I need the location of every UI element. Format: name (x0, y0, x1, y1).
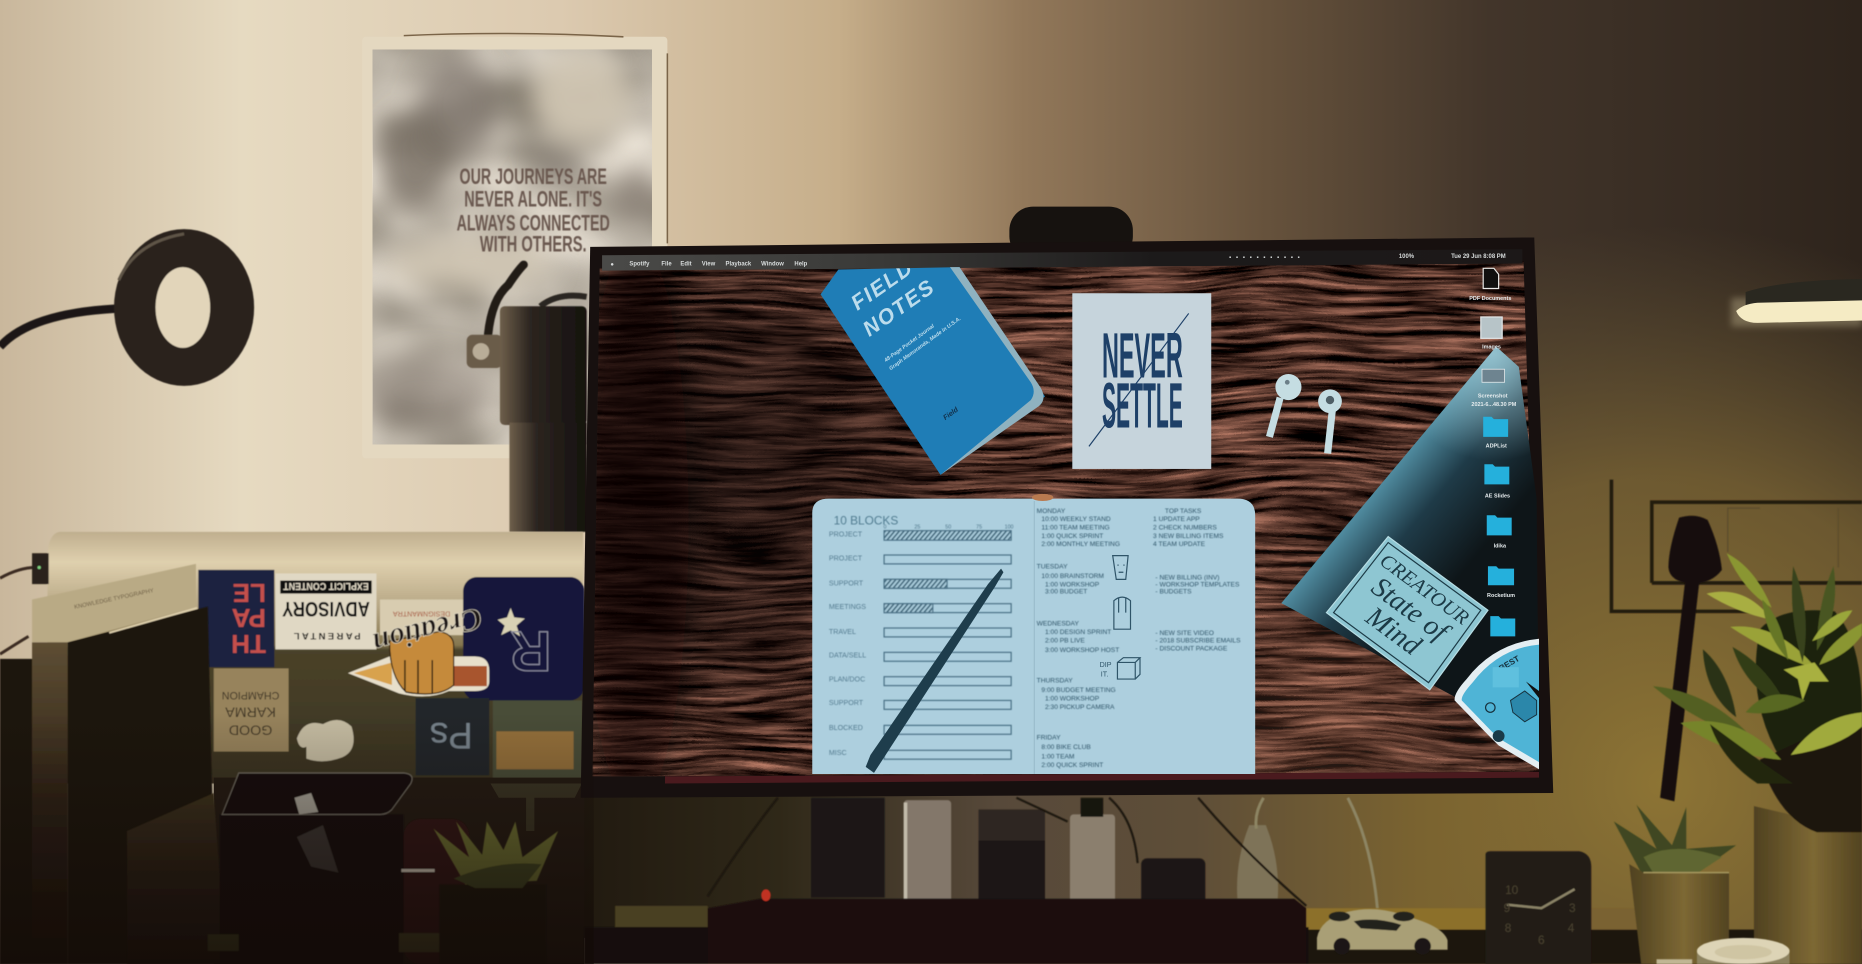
white cup (1657, 938, 1790, 964)
menu bar: Tue 29 Jun 8:08 PM (1451, 254, 1506, 260)
top tasks column: - NEW BILLING (INV) (1155, 574, 1220, 581)
10 blocks page: 0 (884, 524, 887, 530)
sticker: R with star: R (510, 619, 551, 683)
weekly schedule page (1037, 508, 1120, 769)
menu bar: Spotify (629, 261, 650, 267)
blue field notes notebook: Graph Memoranda, Made in U.S.A. (888, 316, 963, 372)
desk lamp shade sticker shape (490, 784, 582, 831)
alarm clock (1486, 851, 1591, 964)
alarm clock: 8 (1505, 921, 1512, 935)
blue field notes notebook (821, 255, 1045, 475)
weekly schedule page: 1:00 QUICK SPRINT (1041, 533, 1103, 540)
monitor: SETTLE (1102, 369, 1183, 441)
sticker: photoshop: Ps (430, 715, 473, 756)
block labels: TRAVEL (829, 628, 856, 636)
weekly schedule page: 2:00 QUICK SPRINT (1041, 762, 1103, 769)
desktop icons: AE Slides (1485, 493, 1510, 499)
sticker: parental advisory: ADVISORY (282, 597, 370, 621)
book on left edge: KNOWLEDGE TYPOGRAPHY (74, 588, 154, 611)
10 blocks page: 75 (976, 524, 982, 530)
weekly schedule page: FRIDAY (1037, 735, 1061, 742)
lettering sticker on laptop (1326, 537, 1488, 690)
weekly schedule page: 1:00 WORKSHOP (1045, 581, 1100, 588)
weekly schedule page: THURSDAY (1037, 678, 1073, 685)
blue badge sticker: BEST (1497, 653, 1521, 673)
top tasks column: 2 CHECK NUMBERS (1153, 524, 1217, 531)
sticker: kraft note good karma: KARMA (225, 704, 276, 720)
weekly schedule page: 2:30 PICKUP CAMERA (1045, 704, 1115, 711)
desktop icons: Images (1482, 344, 1501, 350)
weekly schedule page: 9:00 BUDGET MEETING (1041, 687, 1116, 694)
pen (866, 569, 1003, 773)
weekly schedule page: 3:00 BUDGET (1045, 589, 1087, 596)
doodles: IT. (1101, 671, 1108, 679)
desktop icons: ADPList (1486, 444, 1507, 450)
weekly schedule page: MONDAY (1037, 508, 1066, 515)
wall outlet frame (1611, 480, 1862, 611)
menu bar: Edit (680, 261, 692, 267)
block labels: PROJECT (829, 554, 863, 562)
lamp bar top right (1731, 279, 1862, 326)
menu bar: 100% (1399, 254, 1415, 260)
block labels: MEETINGS (829, 603, 866, 611)
book on left edge (0, 564, 216, 964)
large potted plant (1653, 553, 1862, 964)
weekly schedule page: 1:00 TEAM (1041, 754, 1074, 761)
airpods (1269, 374, 1342, 454)
apple logo (297, 720, 354, 761)
poster with quote (362, 34, 667, 458)
wire basket and folder (127, 773, 469, 964)
menu bar: ● (610, 262, 614, 268)
never settle card (1072, 293, 1211, 469)
desktop icons: Idika (1494, 543, 1507, 549)
lettering sticker on laptop: Mind (1359, 601, 1427, 662)
alarm clock: 3 (1569, 901, 1576, 915)
sticker: creation fist with pencil (348, 601, 489, 696)
top tasks column: 4 TEAM UPDATE (1153, 541, 1206, 548)
weekly schedule page: 1:00 DESIGN SPRINT (1045, 629, 1111, 636)
sticker: the pa lle: PA (232, 603, 266, 633)
top tasks column: - BUDGETS (1155, 589, 1192, 596)
chargers and cables under monitor (708, 798, 1378, 909)
blue field notes notebook: FIELD (846, 255, 918, 315)
top tasks column: - DISCOUNT PACKAGE (1155, 646, 1228, 653)
menu bar: ▪▪▪▪▪▪▪▪▪▪▪ (1229, 255, 1304, 261)
desktop icons: Screenshot (1478, 394, 1508, 400)
ring light on flexible arm (0, 229, 254, 386)
poster quote text (457, 164, 610, 257)
poster quote text: NEVER ALONE. IT'S (464, 187, 602, 212)
sticker: parental advisory (276, 573, 376, 649)
charger plug and cables (0, 553, 49, 654)
poster quote text: WITH OTHERS. (480, 232, 587, 257)
leaves (1653, 553, 1862, 784)
menu bar: Playback (726, 261, 752, 267)
block labels: MISC (829, 749, 847, 757)
monitor bottom red reflection (665, 772, 1539, 784)
sticker: parental advisory: EXPLICIT CONTENT (282, 580, 369, 591)
monitor (581, 237, 1553, 807)
top tasks column: - 2018 SUBSCRIBE EMAILS (1155, 637, 1241, 644)
sticker: R with star (463, 577, 584, 700)
weekly schedule page: TUESDAY (1037, 564, 1068, 571)
sticker: green with label (493, 700, 582, 779)
block bars (884, 531, 1011, 759)
wall adapter and cord (1660, 516, 1722, 801)
block labels (829, 531, 866, 757)
toy car (1317, 909, 1448, 955)
10 blocks page: 10 BLOCKS (834, 514, 898, 528)
laptop on desk wallpaper (1281, 347, 1538, 697)
block labels: PLAN/DOC (829, 675, 865, 683)
alarm clock: 6 (1538, 933, 1545, 947)
doodles (1100, 556, 1140, 679)
top tasks column: - WORKSHOP TEMPLATES (1155, 581, 1240, 588)
top tasks column (1153, 508, 1241, 653)
top tasks column: TOP TASKS (1165, 508, 1202, 515)
sticker: kraft note good karma: CHAMPION (222, 689, 279, 701)
block labels: BLOCKED (829, 724, 863, 732)
top tasks column: 3 NEW BILLING ITEMS (1153, 533, 1224, 540)
sticker: kraft note good karma (214, 668, 289, 751)
menu bar: Help (794, 261, 808, 267)
blue field notes notebook: Field (942, 405, 960, 422)
sticker: creation fist with pencil: Creation (369, 601, 486, 662)
monitor bezel (581, 237, 1553, 798)
desktop icons (1469, 268, 1517, 636)
weekly schedule page: 10:00 BRAINSTORM (1041, 573, 1104, 580)
desk and power strip (584, 889, 1862, 964)
alarm clock: 10 (1505, 883, 1519, 897)
sticker: the pa lle: TH (231, 629, 266, 659)
lettering sticker on laptop: State of (1366, 572, 1457, 650)
weekly schedule page: 8:00 BIKE CLUB (1041, 744, 1091, 751)
menu bar: Window (761, 261, 784, 267)
sticker: photoshop (416, 698, 489, 775)
blue field notes notebook: 48-Page Pocket Journal (883, 323, 936, 364)
block labels: SUPPORT (829, 579, 864, 587)
sticker: design mantra: DESIGNMANTRA (393, 609, 450, 617)
weekly schedule page: WEDNESDAY (1037, 621, 1079, 628)
lower area below laptop (214, 778, 584, 964)
weekly schedule page: 2:00 PB LIVE (1045, 637, 1085, 644)
small plant near basket (433, 822, 558, 964)
10 blocks page (829, 514, 1014, 759)
alarm clock: 9 (1504, 901, 1511, 915)
lower left shadow (0, 712, 594, 964)
notebook open (812, 494, 1255, 774)
10 blocks page: 25 (914, 524, 920, 530)
block labels: SUPPORT (829, 699, 864, 707)
menu bar: View (702, 261, 716, 267)
10 blocks page: 100 (1005, 524, 1014, 530)
monitor: NEVER (1102, 320, 1183, 392)
weekly schedule page: 2:00 MONTHLY MEETING (1041, 541, 1120, 548)
monitor arm clamp behind monitor (467, 265, 587, 532)
poster clouds (362, 52, 657, 430)
weekly schedule page: 10:00 WEEKLY STAND (1041, 516, 1111, 523)
blue field notes notebook: NOTES (858, 274, 940, 341)
alarm clock: 4 (1568, 921, 1575, 935)
menu bar: File (661, 261, 672, 267)
lettering sticker on laptop: CREATOUR (1376, 550, 1473, 629)
weekly schedule page: 1:00 WORKSHOP (1045, 695, 1100, 702)
weekly schedule page: 3:00 WORKSHOP HOST (1045, 647, 1119, 654)
sticker: the pa lle (198, 570, 274, 667)
desktop icons: 2021-6...48.30 PM (1471, 402, 1517, 408)
webcam (1009, 207, 1133, 260)
top tasks column: 1 UPDATE APP (1153, 516, 1200, 523)
10 blocks page: 50 (945, 524, 951, 530)
menu bar (602, 249, 1522, 271)
block labels: PROJECT (829, 531, 863, 539)
sticker: the pa lle: LE (233, 578, 266, 608)
sticker: design mantra (380, 600, 463, 635)
top tasks column: - NEW SITE VIDEO (1155, 630, 1214, 637)
sticker: parental advisory: PARENTAL (291, 630, 361, 641)
weekly schedule page: 11:00 TEAM MEETING (1041, 524, 1110, 531)
desktop icons: PDF Documents (1469, 296, 1511, 302)
blue badge sticker (1455, 639, 1539, 769)
small potted plant (1614, 805, 1736, 964)
wood wallpaper (592, 261, 1539, 776)
block labels: DATA/SELL (829, 652, 866, 660)
laptop lid with stickers (0, 532, 584, 784)
sticker: kraft note good karma: GOOD (229, 721, 272, 737)
poster quote text: OUR JOURNEYS ARE (460, 164, 607, 189)
doodles: DIP (1100, 661, 1112, 669)
poster quote text: ALWAYS CONNECTED (457, 210, 610, 235)
desktop icons: Rocketium (1487, 593, 1515, 599)
